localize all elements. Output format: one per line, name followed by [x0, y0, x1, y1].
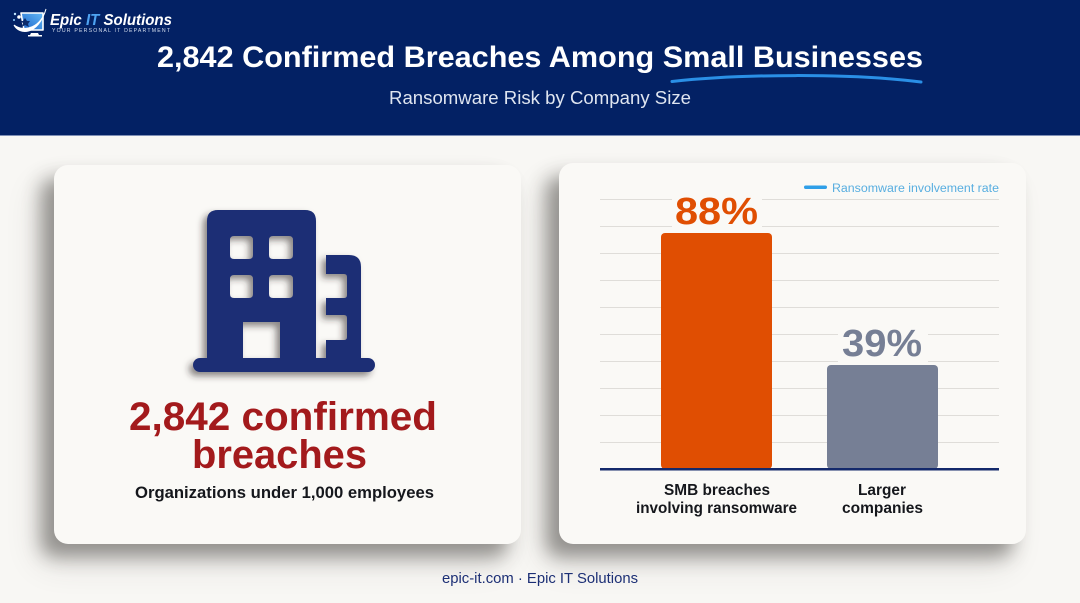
label: SMB [636, 482, 797, 517]
footer: epic-it.com · Epic IT Solutions [442, 571, 638, 587]
label: larger companies: Larger [858, 482, 906, 499]
logo: Epic IT Solutions [13, 9, 172, 36]
icon: monitor logo [13, 9, 46, 36]
label: larger companies: companies [842, 500, 923, 517]
icon: office building [193, 210, 375, 372]
axis baseline [600, 468, 999, 470]
bar: SMB 88%: 88% [675, 191, 758, 233]
label: SMB: SMB breaches [664, 482, 770, 499]
big number: 2,842 confirmed [129, 395, 437, 439]
label: larger companies [842, 482, 923, 517]
label: SMB: involving ransomware [636, 500, 797, 517]
big number: breaches [192, 433, 367, 477]
panel: ransomware chart [559, 163, 1026, 544]
big number [129, 395, 437, 477]
panel: breach count [54, 165, 521, 544]
header band [0, 0, 1080, 136]
title underline [672, 76, 921, 82]
bar: SMB 88% [661, 191, 772, 469]
bar: larger companies 39% [827, 323, 938, 469]
subtitle: Ransomware Risk by Company Size [389, 88, 691, 108]
legend: Ransomware involvement rate [832, 183, 999, 195]
bar: larger companies 39%: 39% [842, 323, 922, 365]
logo: Epic IT Solutions: Epic IT Solutions [50, 12, 172, 29]
caption: Organizations under 1,000 employees [135, 483, 434, 502]
title: 2,842 Confirmed Breaches Among Small Businesses [157, 41, 923, 74]
logo: Epic IT Solutions: YOUR PERSONAL IT DEPARTMENT [52, 28, 171, 34]
